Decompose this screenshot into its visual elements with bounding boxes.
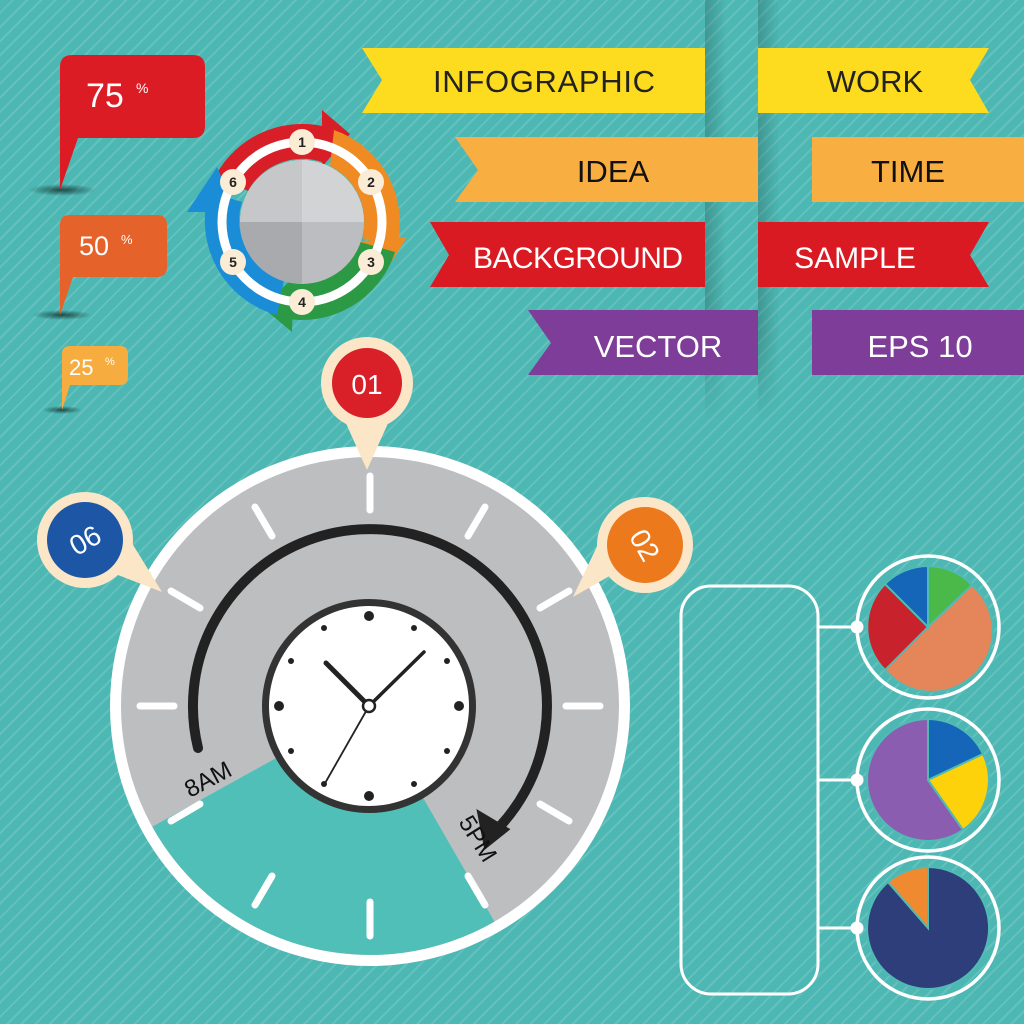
big clock dial — [110, 446, 630, 966]
ribbon: SAMPLE: SAMPLE — [794, 242, 916, 275]
bubble: 50% — [32, 215, 167, 320]
vertical ribbon bands — [705, 0, 774, 400]
pie chart 3 — [857, 857, 999, 999]
cycle diagram: 5 — [229, 254, 237, 270]
connectors — [818, 622, 862, 933]
cycle diagram: 6 — [229, 174, 237, 190]
cycle diagram: 2 — [367, 174, 375, 190]
pie chart 1 — [857, 556, 999, 698]
label 5PM: 5PM — [453, 811, 502, 867]
pin 01 — [321, 337, 413, 470]
ribbon: INFOGRAPHIC: INFOGRAPHIC — [433, 64, 655, 99]
text panel outline — [681, 586, 818, 994]
pin 01: 01 — [351, 369, 383, 400]
pie chart 2 — [857, 709, 999, 851]
ribbon: INFOGRAPHIC — [362, 48, 705, 113]
bubble: 25%: 25 — [69, 355, 93, 380]
bubble: 50%: 50 — [79, 231, 109, 261]
pin 06 — [37, 492, 162, 592]
pin 02: 02 — [623, 524, 666, 566]
ribbon: SAMPLE — [758, 222, 989, 287]
ribbon: BACKGROUND — [430, 222, 705, 287]
ribbon: TIME — [812, 137, 1024, 202]
label 8AM: 8AM — [180, 756, 236, 803]
small clock face — [262, 599, 476, 813]
ribbon: IDEA: IDEA — [577, 154, 649, 189]
bubble: 75%: % — [136, 80, 148, 96]
cycle diagram: 1 — [298, 134, 306, 150]
ribbon: WORK: WORK — [827, 64, 924, 99]
cycle diagram — [187, 110, 407, 332]
bubble: 75% — [28, 55, 205, 196]
bubble: 25% — [42, 346, 128, 414]
ribbon: TIME: TIME — [871, 154, 945, 189]
bubble: 25%: % — [105, 356, 115, 368]
teal work wedge — [152, 706, 495, 955]
ribbon: VECTOR: VECTOR — [594, 329, 722, 364]
bubble: 75%: 75 — [86, 77, 124, 115]
pin 06: 06 — [64, 519, 106, 562]
ribbon: IDEA — [455, 137, 758, 202]
bubble: 50%: % — [121, 232, 133, 247]
cycle diagram: 3 — [367, 254, 375, 270]
ribbon: BACKGROUND: BACKGROUND — [473, 242, 683, 275]
arc arrow — [193, 529, 547, 854]
ribbon: EPS 10: EPS 10 — [867, 329, 973, 364]
ribbon: VECTOR — [528, 310, 758, 375]
cycle diagram: 4 — [298, 294, 306, 310]
ribbon: EPS 10 — [812, 310, 1024, 375]
ribbon: WORK — [758, 48, 989, 113]
pin 02 — [573, 497, 693, 597]
